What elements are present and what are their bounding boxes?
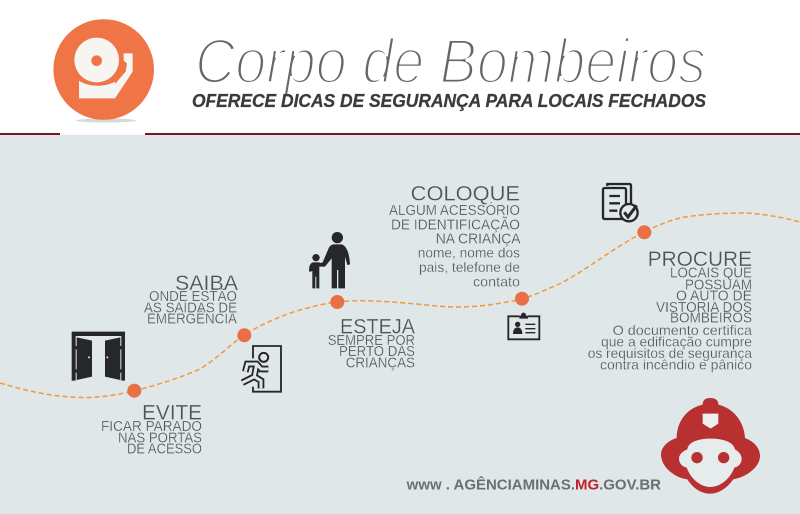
- icon: certified documents: [603, 184, 638, 221]
- text block: procure: BOMBEIROS: [670, 311, 752, 327]
- icon: firefighter helmet: [661, 398, 760, 494]
- text block: procure: que a edificação cumpre: [601, 333, 752, 349]
- text block: evite: NAS PORTAS: [118, 431, 202, 447]
- text block: saiba: SAIBA: [175, 271, 239, 295]
- text block: procure: contra incêndio e pânico: [600, 356, 752, 372]
- text block: coloque: ALGUM ACESSÓRIO: [389, 202, 520, 219]
- text block: saiba: ONDE ESTÃO: [149, 288, 237, 305]
- text block: coloque: DE IDENTIFICAÇÃO: [391, 216, 520, 233]
- text block: coloque: NA CRIANÇA: [436, 232, 521, 248]
- text block: esteja: PERTO DAS: [339, 344, 415, 360]
- text block: evite: [101, 400, 202, 458]
- text block: coloque: [389, 182, 521, 289]
- text block: procure: POSSUAM: [685, 277, 752, 293]
- footer url: www . AGÊNCIAMINAS. MG.GOV.BR: [406, 475, 662, 493]
- text block: procure: LOCAIS QUE: [670, 266, 752, 282]
- text block: coloque: pais, telefone de: [419, 259, 520, 275]
- text block: saiba: EMERGÊNCIA: [147, 311, 237, 328]
- text block: evite: DE ACESSO: [127, 442, 202, 458]
- icon: identification badge: [508, 313, 539, 339]
- text block: procure: os requisitos de segurança: [588, 345, 752, 361]
- text block: saiba: AS SAÍDAS DE: [144, 299, 237, 316]
- icon: adult and child: [309, 232, 350, 288]
- text block: esteja: ESTEJA: [340, 314, 416, 338]
- step markers: [127, 225, 651, 398]
- dashed timeline path: [0, 213, 800, 398]
- text block: procure: [588, 247, 752, 372]
- text block: coloque: COLOQUE: [411, 182, 520, 206]
- title: Corpo de Bombeiros: [195, 27, 706, 97]
- text block: coloque: nome, nome dos: [418, 245, 520, 261]
- text block: esteja: SEMPRE POR: [328, 333, 415, 349]
- text block: procure: O documento certifica: [613, 322, 752, 338]
- subtitle: OFERECE DICAS DE SEGURANÇA PARA LOCAIS FECHADOS: [192, 90, 707, 111]
- text block: esteja: [328, 314, 416, 371]
- icon: open doors: [72, 332, 125, 381]
- text block: esteja: CRIANÇAS: [346, 355, 415, 371]
- text block: evite: EVITE: [142, 400, 202, 424]
- text block: saiba: [144, 271, 239, 328]
- icon: alarm bell: [53, 19, 154, 123]
- text block: coloque: contato: [473, 273, 520, 289]
- text block: procure: VISTORIA DOS: [656, 300, 752, 316]
- icon: emergency exit: [242, 346, 281, 392]
- text block: procure: O AUTO DE: [676, 289, 752, 305]
- text block: procure: PROCURE: [648, 247, 752, 271]
- text block: evite: FICAR PARADO: [101, 419, 202, 435]
